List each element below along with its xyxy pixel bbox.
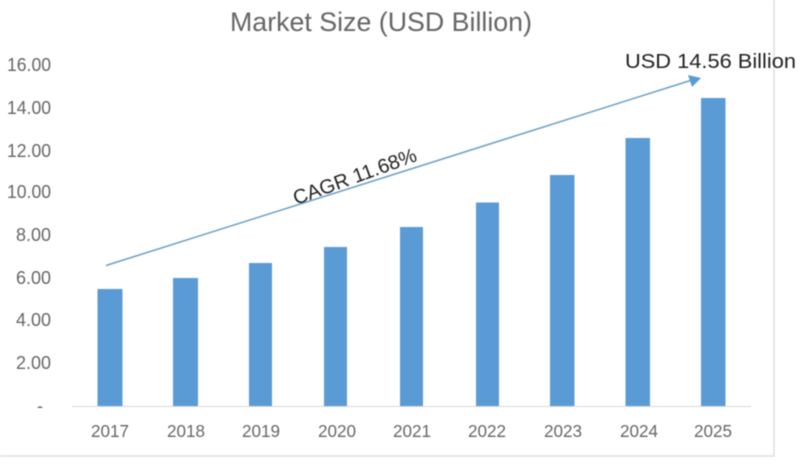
x axis line [72,406,751,408]
y axis labels: 8.00 [16,225,51,245]
y axis labels: 12.00 [7,141,51,161]
x axis labels: 2017 [91,421,129,441]
y axis labels: 4.00 [16,310,51,330]
x axis labels: 2025 [694,421,732,441]
x axis labels: 2023 [544,421,582,441]
y axis labels: - [37,396,43,416]
x axis labels: 2021 [393,421,431,441]
y axis labels: 14.00 [7,98,51,118]
bars [98,98,726,406]
x axis labels: 2024 [620,421,658,441]
y axis labels: 10.00 [7,182,51,202]
x axis labels: 2019 [242,421,280,441]
x axis labels: 2020 [318,421,356,441]
y axis labels: 2.00 [16,353,51,373]
title: Market Size (USD Billion) [230,7,532,37]
x axis labels: 2018 [167,421,205,441]
x axis labels: 2022 [468,421,506,441]
x axis labels [91,421,732,441]
y axis labels [7,55,51,416]
y axis labels: 16.00 [7,55,51,75]
CAGR label: CAGR 11.68% [290,144,420,210]
y axis labels: 6.00 [16,268,51,288]
CAGR arrow [106,75,701,266]
end value callout: USD 14.56 Billion [625,50,796,73]
